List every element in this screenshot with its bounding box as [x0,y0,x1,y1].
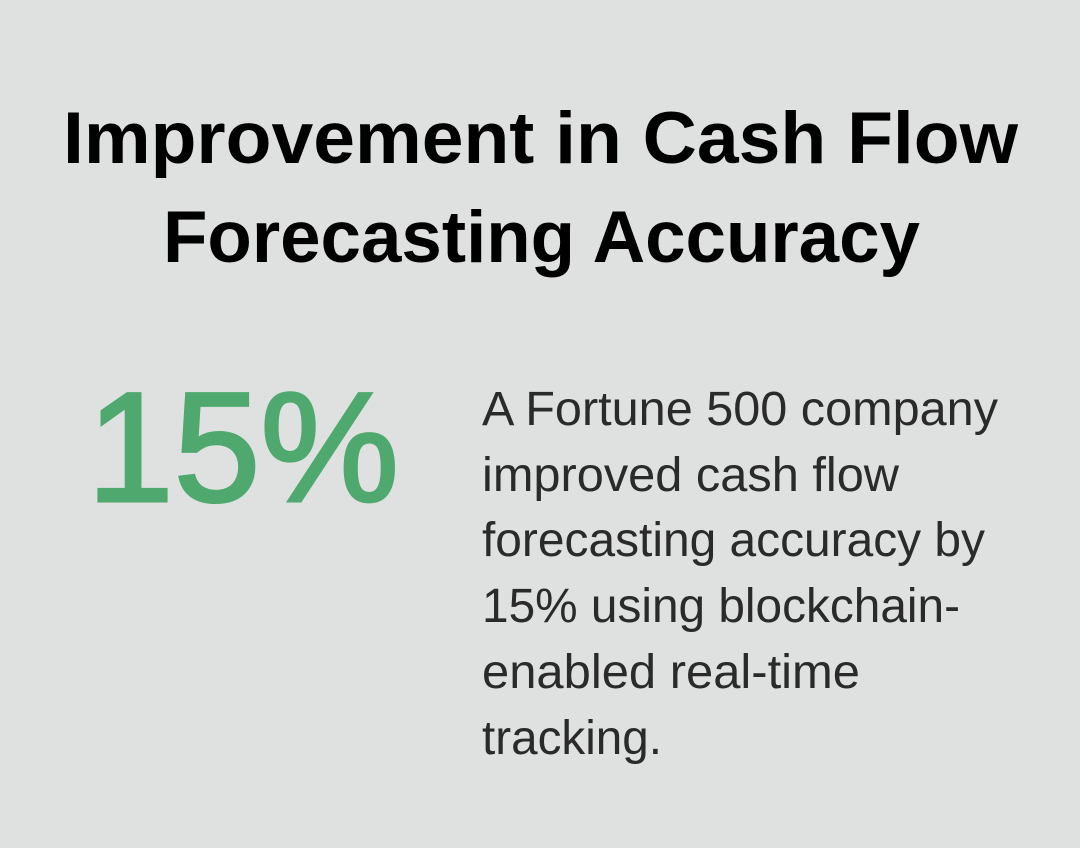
description text: forecasting accuracy by [482,514,985,567]
description text: A Fortune 500 company [482,383,998,436]
big statistic: 15%: 15% [87,361,399,535]
description text: enabled real-time [482,646,860,699]
description text: 15% using blockchain- [482,580,960,633]
description text: tracking. [482,712,662,765]
description text: improved cash flow [482,449,899,502]
description text [482,383,998,765]
title: Improvement in Cash Flow [63,98,1018,179]
title [63,98,1018,278]
title: Forecasting Accuracy [163,197,920,278]
